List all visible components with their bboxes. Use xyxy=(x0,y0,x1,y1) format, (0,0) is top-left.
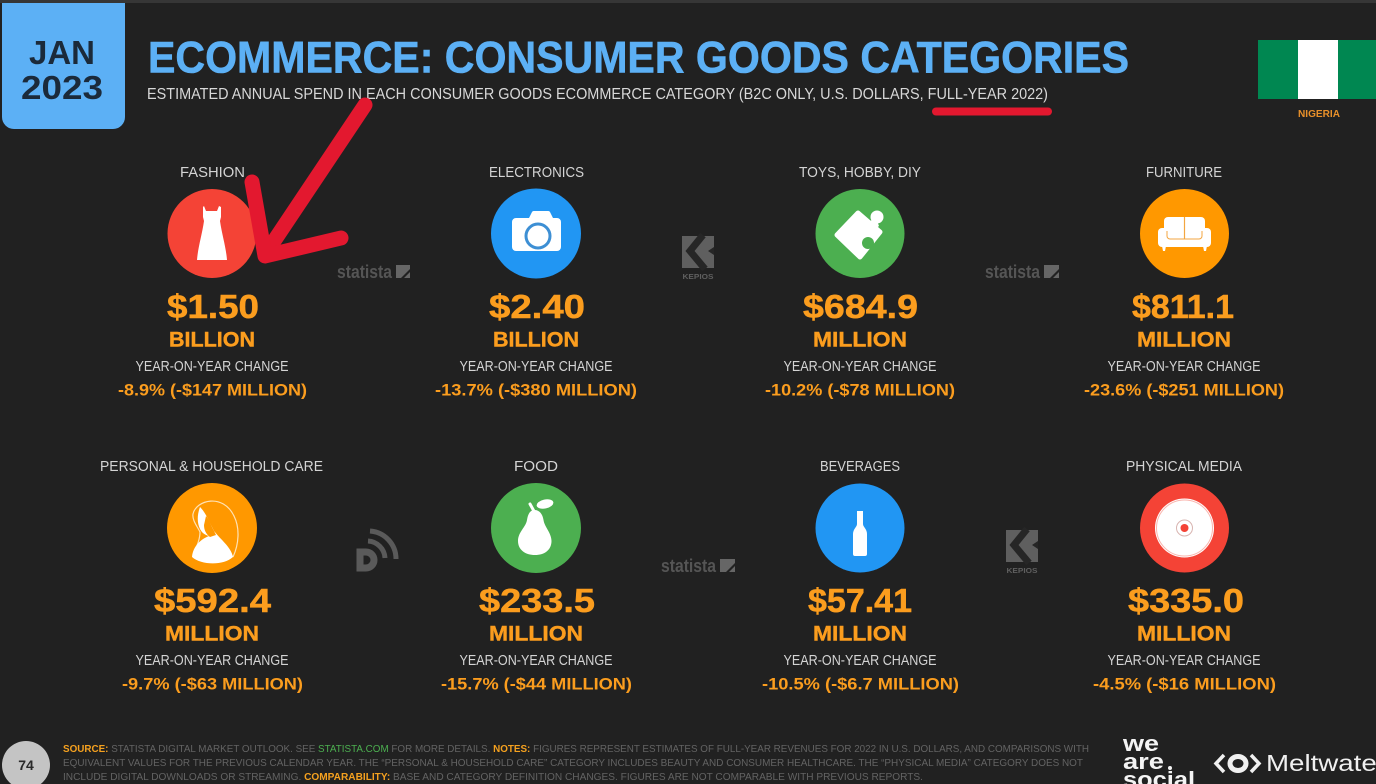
panel: electronics: $2.40 xyxy=(489,288,585,325)
panel: toys, hobby, DIY: -10.2% (-$78 MILLION) xyxy=(765,382,955,400)
panel: personal and household care: $592.4 xyxy=(154,582,272,619)
panel: food xyxy=(441,458,632,694)
watermark: statista 1: statista xyxy=(337,262,393,282)
icon: puzzle piece xyxy=(837,210,884,257)
title: ECOMMERCE: CONSUMER GOODS CATEGORIES xyxy=(148,34,1129,82)
watermark: statista 3: statista xyxy=(661,556,717,576)
date badge: JAN xyxy=(29,34,95,71)
subtitle: ESTIMATED ANNUAL SPEND IN EACH CONSUMER GOODS ECOMMERCE CATEGORY (B2C ONLY, U.S. DOLLARS, FULL-YEAR 2022) xyxy=(147,86,1048,103)
date badge xyxy=(2,3,125,129)
watermark: kepios 1: KEPIOS xyxy=(682,272,714,281)
icon: dress xyxy=(197,206,227,260)
panel: beverages: $57.41 xyxy=(808,582,912,619)
panel: food: $233.5 xyxy=(479,582,595,619)
panel: toys, hobby, DIY xyxy=(765,164,955,400)
icon: woman silhouette xyxy=(192,501,238,563)
panel: furniture: FURNITURE xyxy=(1146,164,1222,181)
panel: physical media: PHYSICAL MEDIA xyxy=(1126,458,1242,475)
panel: fashion: BILLION xyxy=(169,328,255,352)
date badge: 2023 xyxy=(21,69,103,106)
flag: Nigeria: NIGERIA xyxy=(1298,109,1340,120)
panel: electronics: BILLION xyxy=(493,328,579,352)
panel: furniture: -23.6% (-$251 MILLION) xyxy=(1084,382,1284,400)
panel: electronics: -13.7% (-$380 MILLION) xyxy=(435,382,637,400)
watermark: statista 2: statista xyxy=(985,262,1041,282)
panel: furniture: MILLION xyxy=(1137,328,1231,352)
watermark: datareportal xyxy=(360,531,396,568)
flag: Nigeria xyxy=(1258,40,1376,120)
watermark: kepios 1 xyxy=(682,235,714,281)
panel: food: YEAR-ON-YEAR CHANGE xyxy=(460,653,613,669)
footnotes: SOURCE: STATISTA DIGITAL MARKET OUTLOOK. SEE STATISTA.COM FOR MORE DETAILS. NOTES: FIGURES REPRESENT ESTIMATES OF FULL-YEAR REVENUES FOR 2022 IN U.S. DOLLARS, AND COMPARISONS WITH xyxy=(63,743,1089,755)
panel: beverages: -10.5% (-$6.7 MILLION) xyxy=(762,676,959,694)
panel: beverages: BEVERAGES xyxy=(820,458,900,475)
icon: pear xyxy=(518,498,554,555)
footnotes: EQUIVALENT VALUES FOR THE PREVIOUS CALENDAR YEAR. THE “PERSONAL & HOUSEHOLD CARE” CATEGORY INCLUDES BEAUTY AND CONSUMER HEALTHCARE. THE “PHYSICAL MEDIA” CATEGORY DOES NOT xyxy=(63,757,1084,769)
watermark: kepios 2 xyxy=(1006,529,1038,575)
footnotes xyxy=(63,743,1089,783)
panel: toys, hobby, DIY: MILLION xyxy=(813,328,907,352)
panel: fashion xyxy=(118,164,307,400)
panel: physical media: YEAR-ON-YEAR CHANGE xyxy=(1108,653,1261,669)
panel: physical media: $335.0 xyxy=(1128,582,1244,619)
panel: fashion: YEAR-ON-YEAR CHANGE xyxy=(136,359,289,375)
panel: beverages: YEAR-ON-YEAR CHANGE xyxy=(784,653,937,669)
panel: toys, hobby, DIY: TOYS, HOBBY, DIY xyxy=(799,164,921,181)
panel: physical media: MILLION xyxy=(1137,622,1231,646)
logo: Meltwater: Meltwater xyxy=(1266,750,1376,776)
logo: we are social xyxy=(1122,731,1195,784)
panel: beverages: MILLION xyxy=(813,622,907,646)
icon: camera xyxy=(512,211,561,251)
panel: physical media: -4.5% (-$16 MILLION) xyxy=(1093,676,1276,694)
panel: electronics xyxy=(435,164,637,400)
panel: fashion: $1.50 xyxy=(167,288,259,325)
panel: personal and household care: YEAR-ON-YEAR CHANGE xyxy=(136,653,289,669)
panel: furniture xyxy=(1084,164,1284,400)
icon: bottle xyxy=(853,511,867,556)
panel: food: -15.7% (-$44 MILLION) xyxy=(441,676,632,694)
footnotes: INCLUDE DIGITAL DOWNLOADS OR STREAMING. COMPARABILITY: BASE AND CATEGORY DEFINITION CHANGES. FIGURES ARE NOT COMPARABLE WITH PREVIOUS REPORTS. xyxy=(63,771,923,783)
panel: toys, hobby, DIY: $684.9 xyxy=(803,288,918,325)
panel: beverages xyxy=(762,458,959,694)
page number xyxy=(2,741,50,784)
annotation: red arrow xyxy=(252,105,365,256)
panel: personal and household care: -9.7% (-$63 MILLION) xyxy=(122,676,303,694)
logo: Meltwater xyxy=(1216,750,1376,776)
panel: physical media xyxy=(1093,458,1276,694)
panel: fashion: FASHION xyxy=(180,164,245,181)
panel: electronics: YEAR-ON-YEAR CHANGE xyxy=(460,359,613,375)
icon: sofa xyxy=(1158,217,1211,251)
watermark: kepios 2: KEPIOS xyxy=(1006,566,1038,575)
panel: food: FOOD xyxy=(514,458,558,475)
icon: disc xyxy=(1155,498,1214,558)
annotation: red underline xyxy=(936,108,1048,116)
page number: 74 xyxy=(18,757,34,773)
panel: personal and household care xyxy=(100,458,323,694)
logo: we are social: we xyxy=(1122,731,1159,756)
panel: furniture: $811.1 xyxy=(1132,288,1234,325)
panel: furniture: YEAR-ON-YEAR CHANGE xyxy=(1108,359,1261,375)
panel: fashion: -8.9% (-$147 MILLION) xyxy=(118,382,307,400)
panel: food: MILLION xyxy=(489,622,583,646)
panel: personal and household care: PERSONAL & HOUSEHOLD CARE xyxy=(100,458,323,475)
panel: personal and household care: MILLION xyxy=(165,622,259,646)
logo: we are social: are xyxy=(1123,749,1164,774)
panel: toys, hobby, DIY: YEAR-ON-YEAR CHANGE xyxy=(784,359,937,375)
panel: electronics: ELECTRONICS xyxy=(489,164,584,181)
